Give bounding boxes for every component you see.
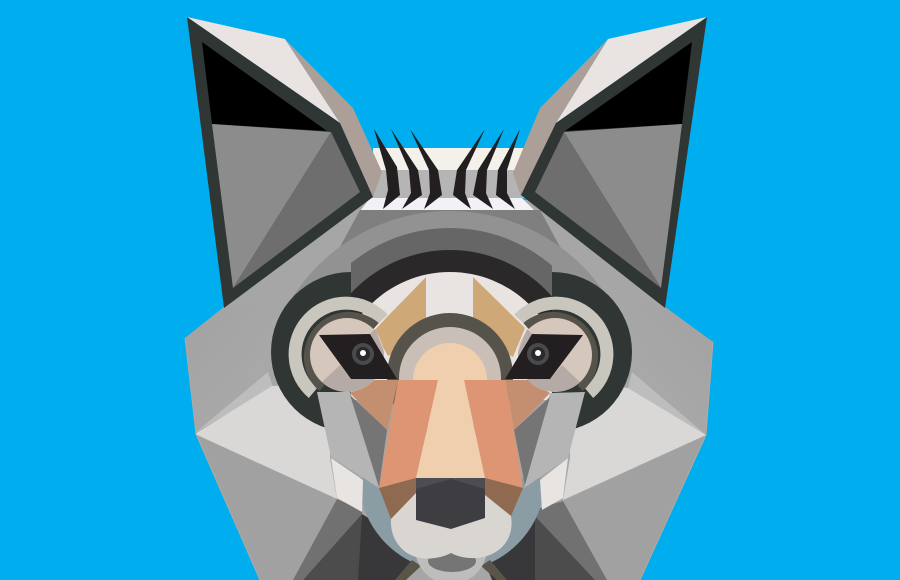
right ear taupe side (513, 39, 608, 197)
muzzle (317, 380, 585, 580)
left ear frame (187, 17, 373, 308)
right silhouette edge (640, 342, 713, 580)
tuft 3 (410, 129, 442, 209)
right pupil inner (531, 347, 545, 361)
right ear black inner (565, 42, 692, 131)
left white cheek patch (331, 458, 363, 512)
right white cheek patch (540, 458, 568, 510)
left olive ring (308, 316, 376, 388)
left ear black inner (202, 42, 327, 131)
tuft 5 (473, 129, 504, 209)
left disc taupe sector (322, 365, 375, 392)
right eye black shape (505, 334, 583, 379)
forehead (293, 210, 602, 400)
right dark gray muzzle side (514, 397, 550, 485)
right salmon bridge (464, 380, 523, 488)
left ear taupe side (285, 39, 382, 197)
left light ring (295, 303, 383, 393)
right tan wedge (473, 277, 525, 357)
forehead gray arc (351, 228, 552, 296)
beige ring (399, 327, 501, 429)
right light gray muzzle side (524, 392, 585, 488)
left ear (187, 17, 382, 308)
left eye black shape (319, 334, 397, 379)
mouth (428, 550, 476, 572)
right disc taupe sliver (518, 329, 532, 358)
left eye glint (360, 350, 366, 356)
cream band (373, 148, 527, 171)
gray band (366, 170, 530, 198)
blue gray jowl (359, 478, 545, 571)
left eye (310, 318, 397, 392)
right eye surround (519, 272, 632, 432)
head fur shading (185, 300, 713, 580)
right eye glint (535, 350, 541, 356)
left brown facet (379, 478, 416, 519)
right brown facet (485, 478, 523, 516)
nose (416, 478, 485, 529)
left cheek mid gray facet (195, 372, 273, 433)
muzzle white lobes (391, 480, 512, 559)
left dark crescent (271, 272, 351, 432)
left dark gray muzzle side (350, 395, 387, 487)
chin (395, 512, 507, 580)
chin disc (415, 512, 487, 580)
right disc taupe sector (527, 365, 580, 392)
right lower cheek dark facet (533, 501, 607, 580)
tufts of fur (374, 129, 520, 209)
crown hair bands (360, 148, 535, 211)
tuft 2 (391, 129, 422, 209)
left lower darkest facet (358, 514, 420, 580)
right light ring (519, 303, 607, 393)
left darker salmon facet (350, 380, 398, 432)
left chin stripe (395, 560, 421, 580)
right lower charcoal facet (533, 514, 595, 580)
right olive ring (526, 316, 594, 388)
left tan wedge (374, 277, 426, 356)
forehead charcoal arc (351, 250, 552, 314)
nose top shading (416, 478, 485, 489)
top left cheek (185, 300, 300, 433)
peach arch (413, 343, 487, 385)
right cheek mid gray facet (628, 372, 706, 435)
left silhouette edge (185, 338, 260, 580)
left disc taupe sliver (370, 329, 384, 358)
tuft 6 (496, 129, 520, 209)
right ear (513, 17, 707, 308)
illustration: geometric wolf head (184, 17, 714, 580)
right ear frame (521, 17, 707, 308)
forehead outer arc (293, 211, 602, 296)
tuft 1 (374, 129, 400, 209)
right ear white top (556, 17, 707, 123)
centre ring and bridge arch (387, 313, 513, 439)
right eye (505, 318, 592, 392)
left eye disc (310, 318, 384, 392)
left salmon bridge (379, 380, 438, 488)
white band (360, 198, 535, 211)
right pupil outer (527, 343, 549, 365)
right lower cheek (563, 436, 706, 580)
face white (351, 272, 552, 400)
left ear light gray facet (212, 124, 331, 288)
right ear dark gray facet (535, 132, 661, 288)
left lower charcoal facet (303, 514, 362, 580)
forehead dark wedge (335, 210, 565, 256)
left ear dark gray facet (233, 132, 360, 288)
head base silhouette (185, 200, 713, 580)
right chin stripe (481, 560, 507, 580)
left cheek light facet (195, 385, 337, 499)
right darker salmon facet (506, 380, 550, 430)
left eye surround (271, 272, 383, 432)
left pupil outer (352, 343, 374, 365)
top right cheek (600, 300, 713, 435)
left lower cheek dark facet (293, 499, 362, 580)
left ear white top (187, 17, 340, 123)
right dark crescent (552, 272, 632, 432)
left pupil inner (356, 347, 370, 361)
right cheek light facet (563, 385, 706, 500)
right ear light gray facet (564, 124, 682, 288)
left lower cheek (196, 435, 337, 580)
tuft 4 (453, 129, 485, 209)
right eye disc (518, 318, 592, 392)
left light gray muzzle side (317, 392, 379, 488)
olive ring (387, 313, 513, 439)
right lower darkest facet (480, 514, 535, 580)
centre peach bridge (416, 380, 485, 478)
